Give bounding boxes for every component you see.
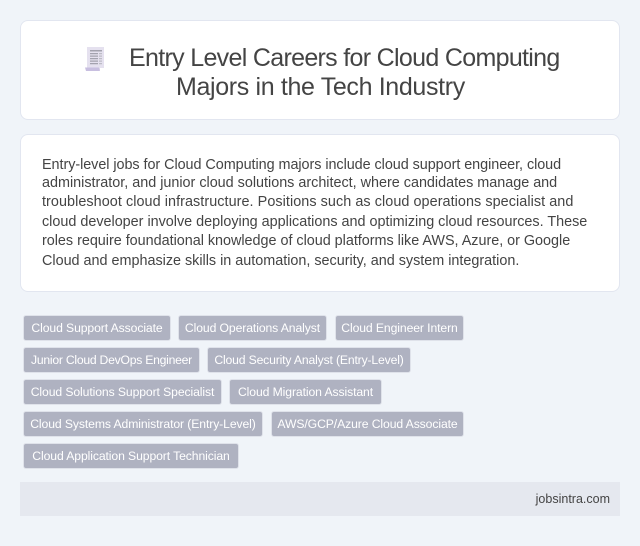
title panel: [20, 20, 620, 120]
panel: description: [20, 134, 620, 292]
tags: Cloud Solutions Support Specialist: [31, 385, 214, 399]
title: Majors in the Tech Industry: [176, 73, 465, 101]
tags: Cloud Security Analyst (Entry-Level): [214, 353, 404, 367]
tags: AWS/GCP/Azure Cloud Associate: [277, 417, 458, 431]
footer: [20, 482, 620, 516]
tags: Cloud Migration Assistant: [238, 385, 373, 399]
icon: document: [85, 47, 104, 71]
title: [129, 44, 560, 101]
tags: Cloud Application Support Technician: [32, 449, 230, 463]
footer source: jobsintra.com: [536, 492, 610, 506]
panel: description: Entry-level jobs for Cloud Computing majors include cloud support engineer, cloud: [42, 157, 561, 173]
tags: Cloud Systems Administrator (Entry-Level): [30, 417, 256, 431]
panel: description: Cloud and emphasize skills in automation, security, and system integration.: [42, 253, 519, 269]
tags: Junior Cloud DevOps Engineer: [31, 353, 192, 367]
panel: description: administrator, and junior cloud solutions architect, where candidates manage and: [42, 175, 557, 191]
tags: Cloud Support Associate: [31, 321, 163, 335]
tags: Cloud Engineer Intern: [341, 321, 458, 335]
tags: Cloud Operations Analyst: [185, 321, 320, 335]
panel: description: cloud developer involve deploying applications and optimizing cloud resources. These: [42, 214, 587, 230]
title: Entry Level Careers for Cloud Computing: [129, 44, 560, 72]
panel: description: troubleshoot cloud infrastructure. Positions such as cloud operations specialist and: [42, 194, 573, 210]
panel: description: roles require foundational knowledge of cloud platforms like AWS, Azure, or Google: [42, 233, 570, 249]
tags: [23, 315, 464, 469]
